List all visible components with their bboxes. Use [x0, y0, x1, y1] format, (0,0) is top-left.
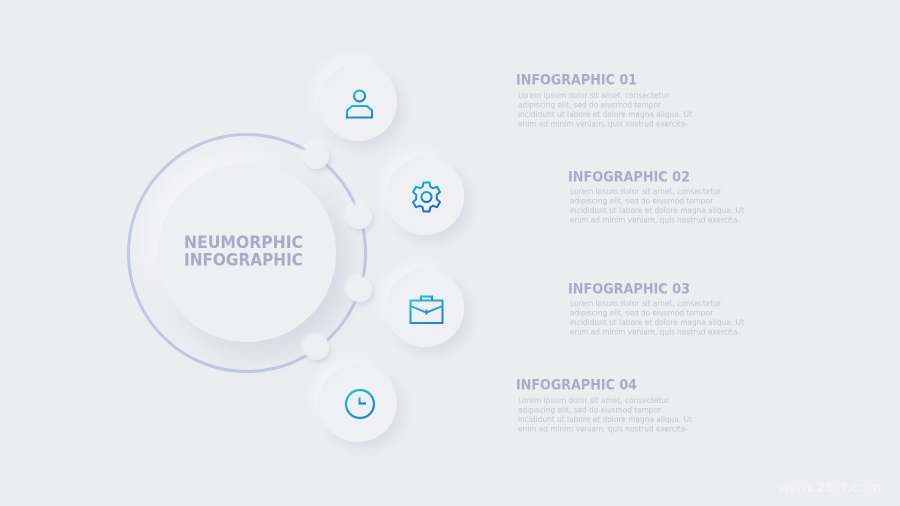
body 04: [518, 395, 693, 434]
node: clock: [319, 364, 397, 442]
connector knob 4: [304, 335, 329, 360]
body 02: Lorem ipsum dolor sit amet, consectetur: [570, 186, 722, 196]
body 04: Lorem ipsum dolor sit amet, consectetur: [518, 395, 670, 405]
node: gear: [386, 157, 464, 235]
connector knob 3: [347, 277, 372, 302]
text block: infographic 03: [568, 282, 745, 336]
body 03: [570, 298, 745, 336]
central title: [184, 233, 303, 270]
connector knob 2: [347, 204, 372, 229]
heading 03: INFOGRAPHIC 03: [568, 282, 690, 298]
icon: person: [346, 90, 373, 118]
text block: infographic 02: [568, 170, 745, 224]
body 02: [570, 186, 745, 224]
watermark: www.25xt.com: [778, 479, 882, 496]
body 04: enim ad minim veniam, quis nostrud exercita-: [518, 424, 688, 434]
text block: infographic 04: [516, 378, 693, 434]
icon: gear: [412, 182, 441, 212]
body 04: adipiscing elit, sed do eiusmod tempor: [518, 404, 662, 414]
heading 02: INFOGRAPHIC 02: [568, 170, 690, 186]
central title: NEUMORPHIC: [184, 233, 303, 252]
outer ring: [127, 133, 367, 373]
body 03: incididunt ut labore et dolore magna aliqua. Ut: [570, 317, 745, 327]
icon: briefcase: [410, 296, 444, 324]
body 02: incididunt ut labore et dolore magna aliqua. Ut: [570, 205, 745, 215]
heading 01: INFOGRAPHIC 01: [516, 72, 637, 88]
body 03: Lorem ipsum dolor sit amet, consectetur: [570, 298, 722, 308]
connector knob 1: [304, 144, 329, 169]
body 01: [518, 90, 693, 128]
node: person: [319, 63, 397, 141]
body 03: enim ad minim veniam, quis nostrud exercita-: [570, 326, 740, 336]
heading 04: INFOGRAPHIC 04: [516, 378, 637, 394]
body 03: adipiscing elit, sed do eiusmod tempor: [570, 308, 714, 318]
body 02: enim ad minim veniam, quis nostrud exercita-: [570, 214, 740, 224]
node: briefcase: [386, 269, 464, 347]
panel: central hub: [127, 133, 367, 373]
central title: INFOGRAPHIC: [184, 251, 303, 270]
icon: clock: [344, 388, 375, 420]
body 01: adipiscing elit, sed do eiusmod tempor: [518, 100, 662, 110]
body 01: Lorem ipsum dolor sit amet, consectetur: [518, 90, 670, 100]
text block: infographic 01: [516, 72, 693, 128]
central disc: [158, 164, 336, 342]
body 02: adipiscing elit, sed do eiusmod tempor: [570, 196, 714, 206]
body 04: incididunt ut labore et dolore magna aliqua. Ut: [518, 414, 693, 424]
body 01: enim ad minim veniam, quis nostrud exercita-: [518, 118, 688, 128]
body 01: incididunt ut labore et dolore magna aliqua. Ut: [518, 109, 693, 119]
